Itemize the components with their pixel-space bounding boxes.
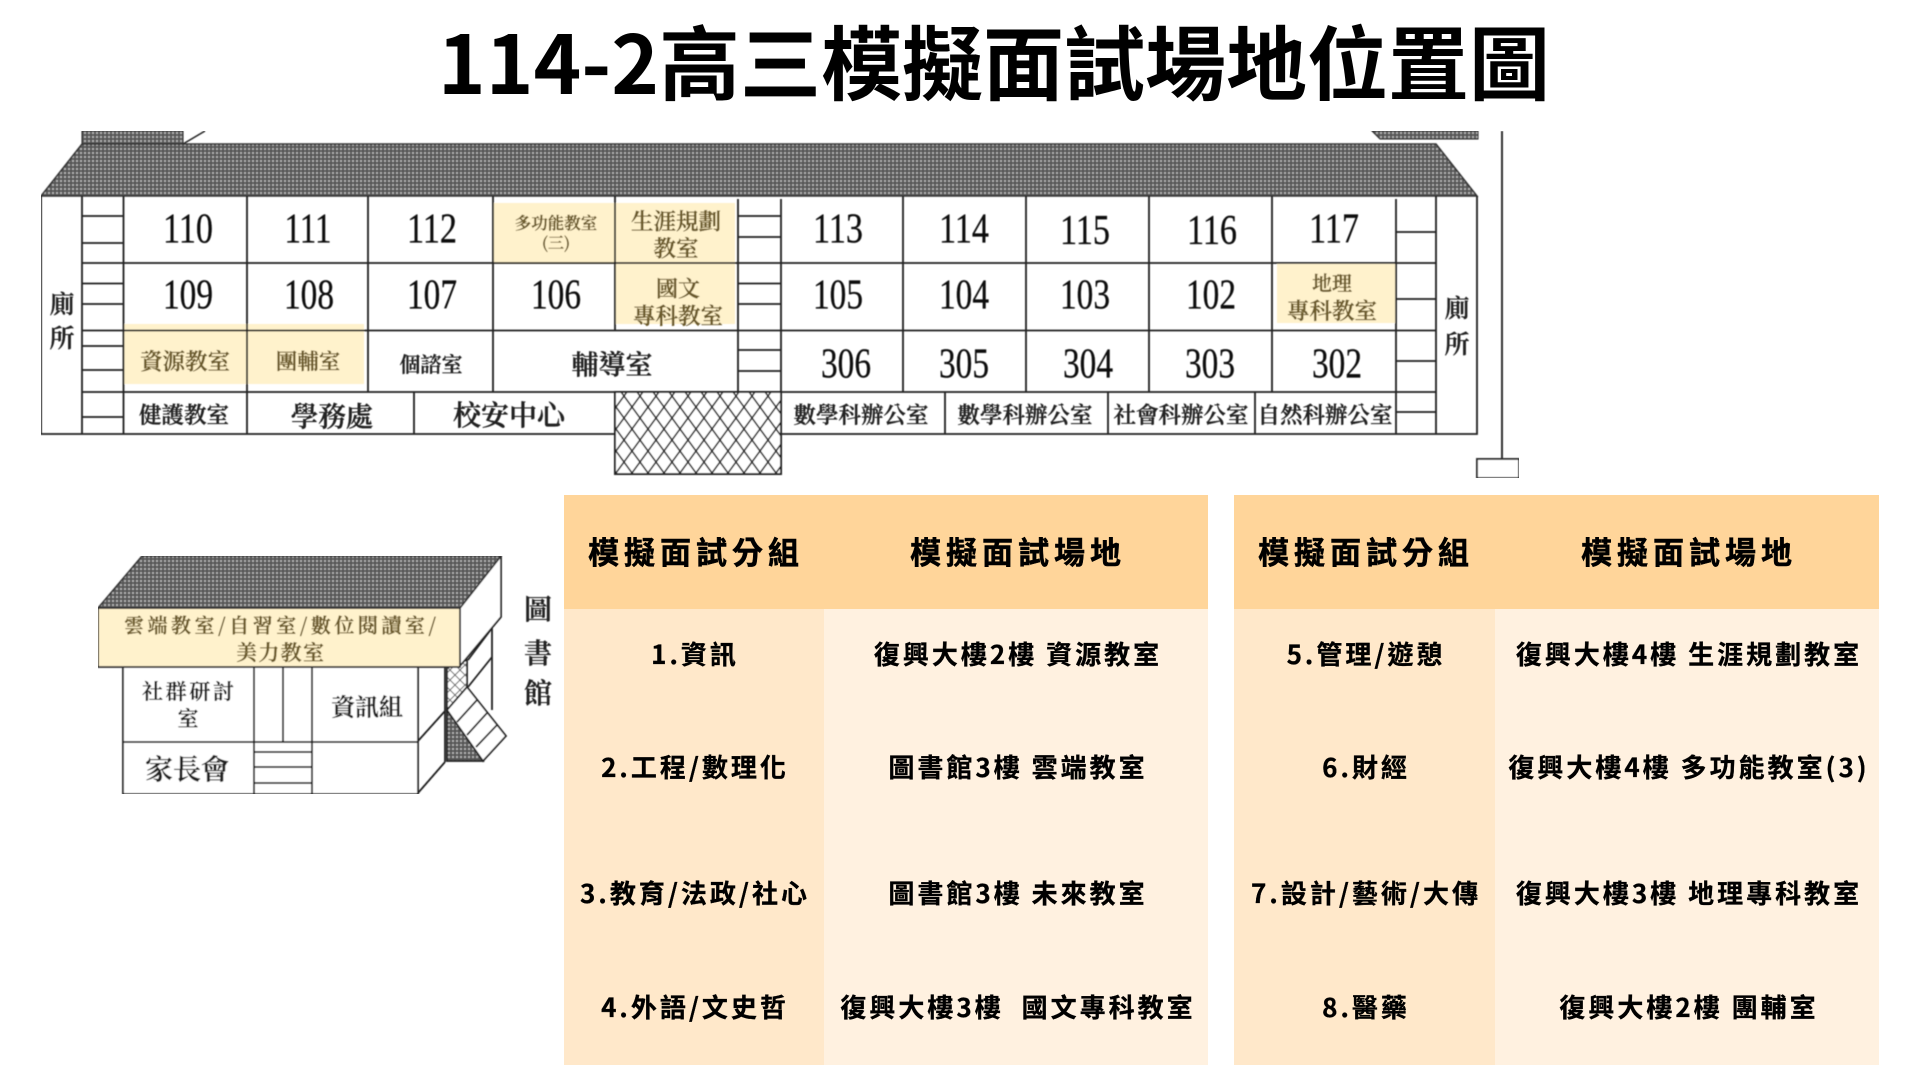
room numbers row 2: 108 — [284, 272, 334, 318]
other room labels: 個諮室 — [400, 349, 462, 379]
other room labels: 自然科辦公室 — [1257, 398, 1393, 430]
library vertical label: 館 — [524, 672, 552, 712]
room numbers row 2: 107 — [407, 272, 457, 318]
left table header bar — [564, 495, 1208, 609]
highlighted room labels: 生涯規劃 — [631, 204, 721, 236]
room numbers row 1: 117 — [1309, 206, 1359, 252]
venue 5: 復興大樓4樓 生涯規劃教室 — [1516, 635, 1862, 672]
restroom labels: 廁 — [49, 285, 75, 321]
right table group column — [1234, 609, 1495, 1065]
group 6: 6.財經 — [1322, 748, 1410, 785]
room numbers row 3: 304 — [1063, 342, 1113, 388]
highlighted room labels: 教室 — [653, 232, 699, 264]
highlighted room labels: 國文 — [656, 272, 700, 304]
other room labels: 學務處 — [290, 394, 373, 434]
left table panel background — [564, 495, 1208, 1065]
venue 6: 復興大樓4樓 多功能教室(3) — [1508, 748, 1870, 785]
group 4: 4.外語/文史哲 — [601, 988, 789, 1025]
other room labels: 數學科辦公室 — [957, 398, 1093, 430]
room numbers row 1: 111 — [284, 206, 332, 252]
library vertical label: 圖 — [524, 588, 552, 628]
library top floor labels: 雲端教室/自習室/數位閱讀室/ — [124, 610, 436, 638]
venue 2: 圖書館3樓 雲端教室 — [888, 748, 1148, 785]
other room labels: 社會科辦公室 — [1113, 398, 1249, 430]
highlighted room labels: (三) — [542, 230, 570, 254]
room numbers row 1: 116 — [1187, 208, 1237, 254]
yellow room highlights — [124, 203, 1395, 384]
building roof — [41, 144, 1477, 196]
room numbers row 3: 306 — [821, 342, 871, 388]
room numbers row 1: 115 — [1060, 208, 1110, 254]
left table group column — [564, 609, 824, 1065]
venue 4: 復興大樓3樓 國文專科教室 — [840, 988, 1196, 1025]
room numbers row 2: 106 — [531, 272, 581, 318]
room numbers row 2: 104 — [939, 272, 989, 318]
venue 1: 復興大樓2樓 資源教室 — [874, 635, 1162, 672]
library walls and stairs — [123, 556, 506, 794]
highlighted room labels — [140, 204, 1377, 376]
library top floor yellow band — [98, 608, 460, 667]
other room labels: 輔導室 — [572, 344, 652, 382]
library vertical label — [524, 588, 552, 712]
library top floor labels: 美力教室 — [236, 637, 324, 667]
library room labels — [142, 676, 403, 788]
library room labels: 家長會 — [145, 748, 229, 788]
restroom labels — [49, 285, 1470, 361]
restroom labels: 廁 — [1444, 289, 1470, 325]
library top floor labels — [124, 610, 436, 667]
room numbers row 1 — [163, 206, 1359, 254]
group 2: 2.工程/數理化 — [601, 748, 789, 785]
restroom labels: 所 — [49, 319, 75, 355]
entrance hatched area — [615, 392, 781, 474]
room numbers row 1: 112 — [407, 206, 457, 252]
room numbers row 2: 102 — [1186, 272, 1236, 318]
title: 114-2高三模擬面試場地位置圖 — [438, 1, 1550, 118]
other room labels — [139, 344, 1393, 434]
highlighted room labels: 專科教室 — [1287, 294, 1377, 326]
highlighted room labels: 團輔室 — [276, 345, 340, 376]
library room labels: 室 — [178, 703, 198, 733]
right table header: groups: 模擬面試分組 — [1258, 528, 1474, 573]
room numbers row 1: 110 — [163, 206, 213, 252]
right table panel background — [1234, 495, 1879, 1065]
highlighted room labels: 資源教室 — [140, 344, 230, 376]
left table header: venues: 模擬面試場地 — [910, 528, 1126, 573]
venue 3: 圖書館3樓 未來教室 — [888, 874, 1148, 911]
highlighted room labels: 多功能教室 — [515, 210, 597, 234]
flagpole — [1477, 131, 1519, 478]
room numbers row 2: 109 — [163, 272, 213, 318]
venue 7: 復興大樓3樓 地理專科教室 — [1516, 874, 1862, 911]
room numbers row 2: 103 — [1060, 272, 1110, 318]
highlighted room labels: 專科教室 — [633, 299, 723, 331]
library room labels: 資訊組 — [331, 688, 403, 722]
left table header: groups: 模擬面試分組 — [588, 528, 804, 573]
other room labels: 數學科辦公室 — [793, 398, 929, 430]
highlighted room labels: 地理 — [1312, 268, 1352, 296]
restroom labels: 所 — [1444, 325, 1470, 361]
group 5: 5.管理/遊憩 — [1287, 635, 1445, 672]
group 8: 8.醫藥 — [1322, 988, 1410, 1025]
room numbers row 2 — [163, 272, 1236, 318]
library room labels: 社群研討 — [142, 676, 234, 706]
room numbers row 2: 105 — [813, 272, 863, 318]
room numbers row 3: 303 — [1185, 342, 1235, 388]
other room labels: 校安中心 — [453, 394, 568, 434]
room numbers row 3: 302 — [1312, 342, 1362, 388]
library vertical label: 書 — [524, 632, 552, 672]
upper floor roof fragments — [82, 131, 1478, 144]
room numbers row 1: 114 — [939, 206, 989, 252]
floor plan wall lines — [41, 196, 1477, 434]
room numbers row 3 — [821, 342, 1362, 388]
right table header: venues: 模擬面試場地 — [1581, 528, 1797, 573]
room numbers row 3: 305 — [939, 342, 989, 388]
group 3: 3.教育/法政/社心 — [580, 874, 810, 911]
other room labels: 健護教室 — [139, 398, 229, 430]
library roof — [98, 556, 501, 608]
group 1: 1.資訊 — [651, 635, 739, 672]
right table header bar — [1234, 495, 1879, 609]
group 7: 7.設計/藝術/大傳 — [1251, 874, 1481, 911]
room numbers row 1: 113 — [813, 206, 863, 252]
venue 8: 復興大樓2樓 團輔室 — [1559, 988, 1819, 1025]
